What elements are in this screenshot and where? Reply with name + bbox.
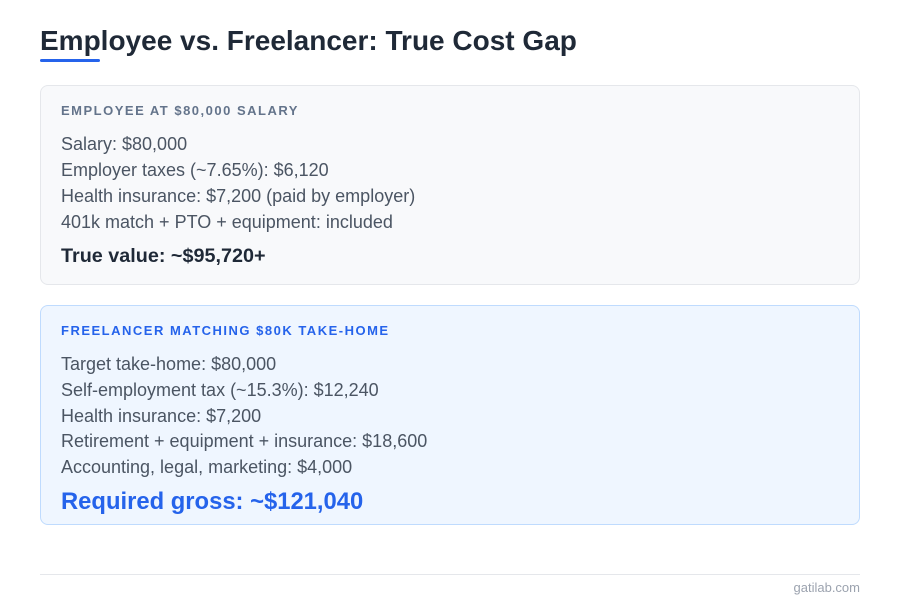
freelancer cost lines: Target take-home: $80,000 bbox=[61, 354, 276, 374]
title: Employee vs. Freelancer: True Cost Gap bbox=[40, 25, 577, 56]
employee true value: True value: ~$95,720+ bbox=[61, 245, 266, 267]
employee cost lines: Salary: $80,000 bbox=[61, 134, 187, 154]
freelancer heading: FREELANCER MATCHING $80K TAKE-HOME bbox=[61, 323, 390, 338]
source credit: gatilab.com bbox=[794, 580, 860, 595]
freelancer cost lines: Health insurance: $7,200 bbox=[61, 406, 261, 426]
employee cost lines: Health insurance: $7,200 (paid by employer) bbox=[61, 186, 415, 206]
title underline accent bbox=[40, 59, 100, 62]
employee cost lines bbox=[61, 134, 415, 232]
employee cost lines: 401k match + PTO + equipment: included bbox=[61, 212, 393, 232]
panel: freelancer bbox=[40, 305, 860, 525]
freelancer required gross: Required gross: ~$121,040 bbox=[61, 488, 363, 515]
freelancer cost lines bbox=[61, 354, 427, 477]
freelancer cost lines: Accounting, legal, marketing: $4,000 bbox=[61, 457, 352, 477]
employee cost lines: Employer taxes (~7.65%): $6,120 bbox=[61, 160, 329, 180]
freelancer cost lines: Retirement + equipment + insurance: $18,600 bbox=[61, 431, 427, 451]
panel: employee bbox=[40, 85, 860, 285]
freelancer cost lines: Self-employment tax (~15.3%): $12,240 bbox=[61, 380, 379, 400]
employee heading: EMPLOYEE AT $80,000 SALARY bbox=[61, 103, 299, 118]
